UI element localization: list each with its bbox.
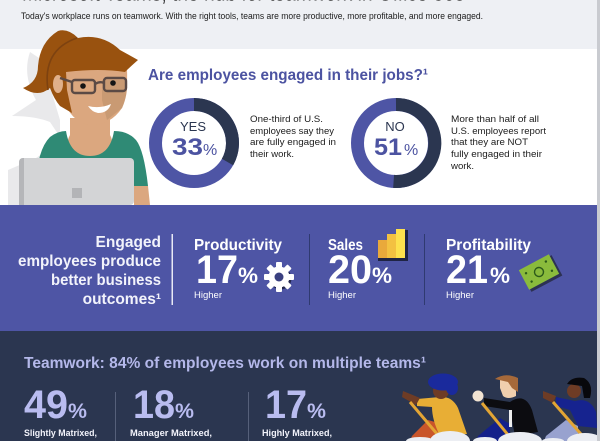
clouds — [406, 431, 600, 441]
panel: header — [0, 0, 600, 49]
stat: slightly matrixed: 49 — [24, 383, 68, 427]
stat: slightly matrixed: % — [68, 400, 87, 423]
rower 3 — [543, 378, 597, 441]
hair — [23, 30, 138, 113]
text: no description: that they are NOT — [451, 137, 528, 148]
panel: teamwork — [0, 331, 600, 441]
text: engaged employees: employees produce — [18, 253, 161, 270]
icon: money — [519, 253, 562, 292]
text: engaged employees: outcomes¹ — [83, 291, 161, 308]
stat: productivity: Productivity — [194, 237, 282, 254]
stat: highly matrixed — [262, 383, 332, 438]
icon: bar chart — [378, 229, 408, 261]
stat: productivity: Higher — [194, 290, 222, 301]
text: no description: U.S. employees report — [451, 126, 546, 137]
text: yes description: One-third of U.S. — [250, 114, 323, 125]
stat: profitability: % — [490, 263, 510, 288]
rower 2 — [472, 375, 538, 441]
stat: manager matrixed: 18 — [133, 383, 175, 427]
stat: sales: % — [372, 263, 392, 288]
stat: manager matrixed: % — [175, 400, 194, 423]
stat: productivity: % — [238, 263, 258, 288]
heading: Are employees engaged in their jobs?¹ — [148, 67, 428, 84]
stat: highly matrixed: % — [307, 400, 326, 423]
donut: no 51% — [358, 104, 435, 182]
stat: sales: Sales — [328, 237, 363, 254]
text: engaged employees: better business — [51, 272, 161, 289]
text: yes description: are fully engaged in — [250, 137, 336, 148]
donut: no 51%: NO — [385, 119, 405, 134]
stat: profitability — [446, 237, 531, 301]
text: no description: work. — [450, 161, 474, 172]
text: yes description: employees say they — [250, 126, 334, 137]
donut: yes 33%: YES — [180, 119, 206, 134]
text: yes description: their work. — [250, 149, 294, 160]
stat: slightly matrixed: Slightly Matrixed, — [24, 428, 97, 438]
text: engaged employees — [18, 234, 161, 308]
stat: profitability: Higher — [446, 290, 474, 301]
stat: highly matrixed: Highly Matrixed, — [262, 428, 332, 438]
donut: no 51%: 51 — [374, 134, 402, 161]
panel: engagement — [0, 30, 597, 205]
rower 1 — [402, 374, 467, 441]
stat: profitability: 21 — [446, 248, 488, 292]
stat: productivity — [194, 237, 282, 301]
donut: yes 33%: 33 — [172, 134, 203, 161]
text: no description: fully engaged in their — [451, 149, 543, 160]
panel: business outcomes — [0, 205, 597, 331]
illustration: rowers — [402, 374, 600, 441]
illustration: woman with laptop — [8, 30, 150, 205]
text: yes description — [250, 114, 336, 160]
stat: slightly matrixed — [24, 383, 97, 438]
stat: manager matrixed — [130, 383, 212, 438]
text: no description — [450, 114, 546, 172]
glasses — [60, 78, 126, 93]
right page edge — [597, 0, 600, 441]
stat: profitability: Profitability — [446, 237, 531, 254]
stat: sales: Higher — [328, 290, 356, 301]
stat: manager matrixed: Manager Matrixed, — [130, 428, 212, 438]
heading: Teamwork: 84% of employees work on multiple teams¹ — [24, 355, 426, 372]
stat: sales: 20 — [328, 248, 372, 292]
stat: sales — [328, 237, 392, 301]
donut: no 51%: % — [404, 142, 418, 159]
subtitle: Today's workplace runs on teamwork. With the right tools, teams are more productive, more profitable, and more engaged. — [21, 11, 483, 22]
stat: highly matrixed: 17 — [265, 383, 307, 427]
donut: yes 33% — [156, 104, 233, 182]
icon: gear — [264, 262, 294, 292]
text: engaged employees: Engaged — [96, 234, 161, 251]
donut: yes 33%: % — [203, 142, 217, 159]
laptop — [19, 158, 134, 205]
text: no description: More than half of all — [451, 114, 539, 125]
stat: productivity: 17 — [196, 248, 238, 292]
